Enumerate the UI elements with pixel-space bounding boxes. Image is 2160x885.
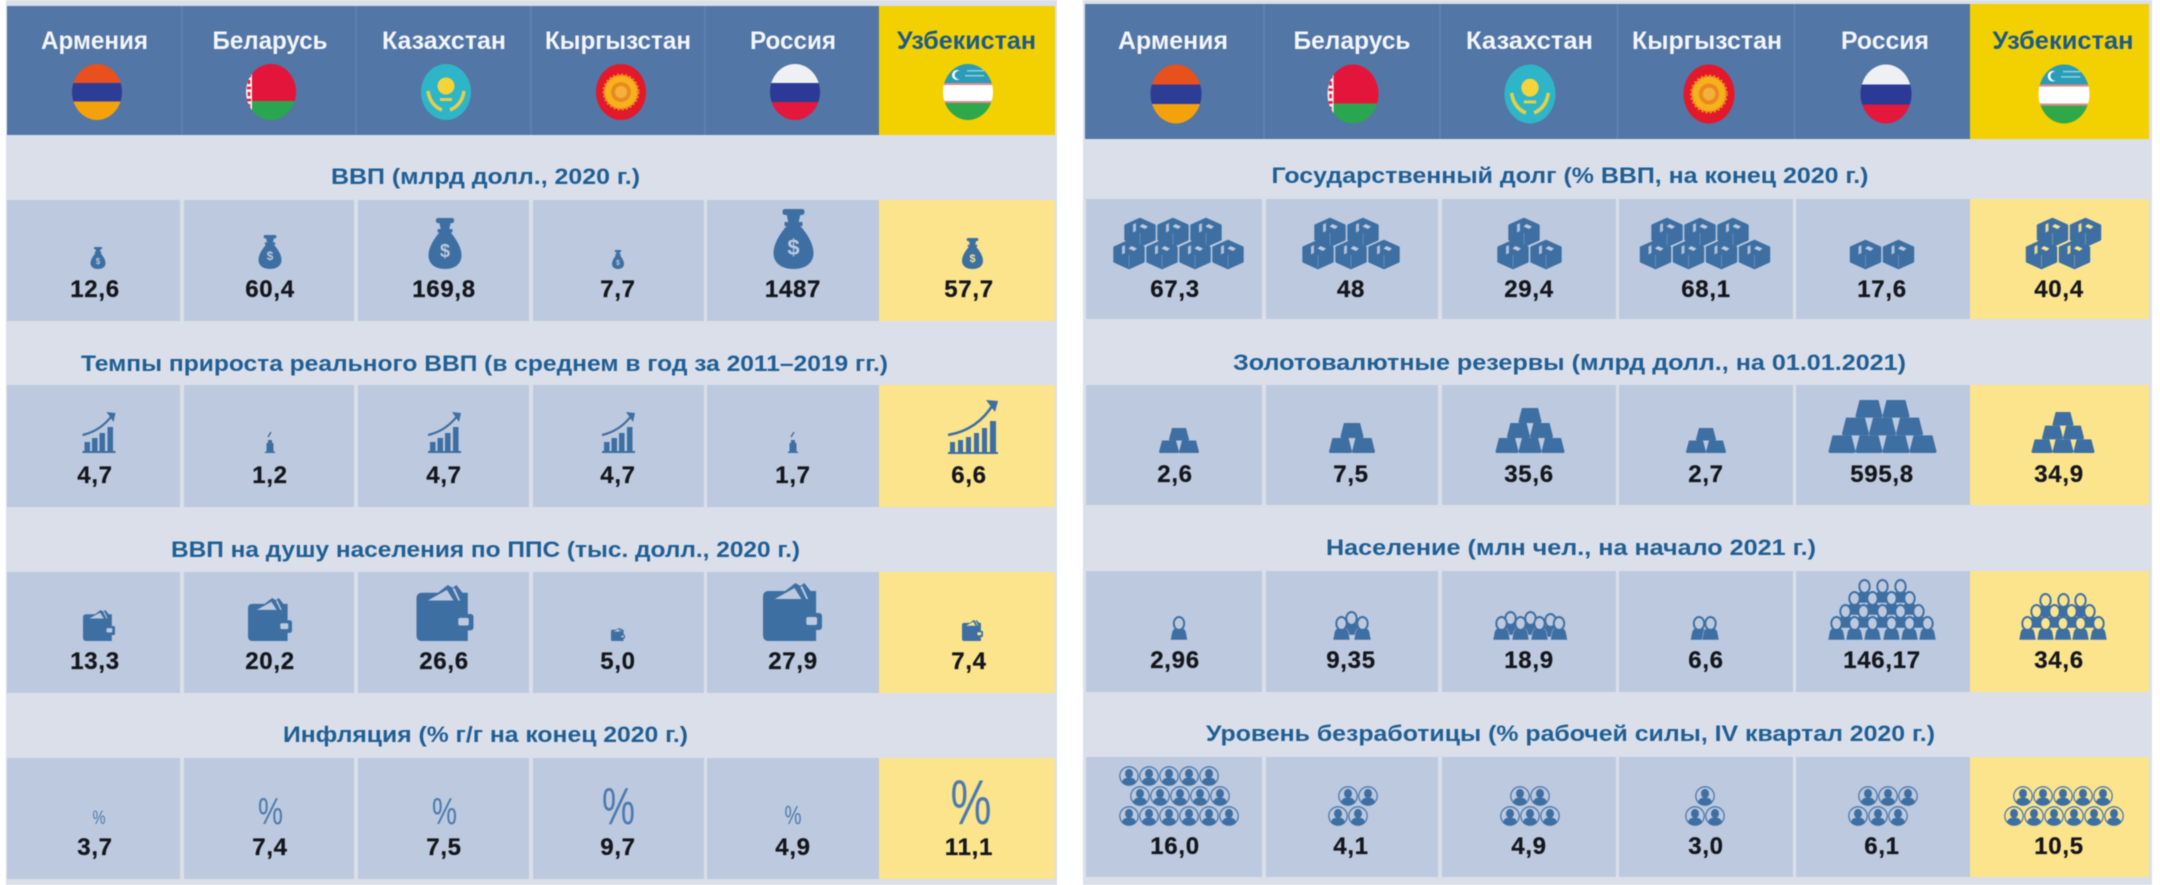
icon: money bag 12,6 xyxy=(90,247,106,269)
values: 146,17 xyxy=(1843,647,1921,674)
icon: people 18,9 xyxy=(1493,612,1568,640)
values: 60,4 xyxy=(245,276,295,303)
values xyxy=(70,276,994,303)
icon: unemployed 6,1 xyxy=(1849,787,1917,825)
country: Кыргызстан: Кыргызстан xyxy=(1632,27,1782,55)
icon: boxes 48 xyxy=(1304,219,1398,268)
values: 13,3 xyxy=(70,648,120,675)
icon: money bag 1487 xyxy=(774,209,814,269)
icon: people 146,17 xyxy=(1828,580,1936,640)
values xyxy=(1150,647,2084,674)
values xyxy=(1157,461,2084,488)
icon: percent 11,1: % xyxy=(950,768,992,838)
heading: Инфляция: Инфляция (% г/г на конец 2020 г.) xyxy=(283,722,688,747)
values: 169,8 xyxy=(412,276,476,303)
country: Беларусь xyxy=(212,27,328,120)
values: 6,6 xyxy=(951,462,987,489)
icon: percent 3,7: % xyxy=(92,808,106,829)
values: 4,9 xyxy=(1511,833,1547,860)
values: 4,1 xyxy=(1333,833,1369,860)
values: 7,4 xyxy=(252,834,288,861)
values xyxy=(77,834,993,861)
country: Казахстан xyxy=(1466,27,1593,124)
country: Казахстан xyxy=(382,27,506,120)
country: Беларусь: Беларусь xyxy=(212,27,328,55)
row: ВВП на душу values xyxy=(7,572,1055,693)
row: резервы values xyxy=(1086,385,2149,505)
values: 1,2 xyxy=(252,462,288,489)
values: 3,0 xyxy=(1688,833,1724,860)
panel: left table xyxy=(6,0,1057,885)
icon: unemployed 10,5 xyxy=(2005,787,2123,825)
values: 4,7 xyxy=(77,462,113,489)
icon: gold bars 34,9 xyxy=(2032,412,2094,453)
country: Армения: Армения xyxy=(1118,27,1228,55)
values: 57,7 xyxy=(944,276,994,303)
values: 11,1 xyxy=(945,834,993,861)
country: Узбекистан xyxy=(1992,27,2134,124)
values: 3,7 xyxy=(77,834,113,861)
icon: money bag 7,7: $ xyxy=(616,260,620,267)
country: Армения xyxy=(1118,27,1228,124)
icon: wallet 26,6 xyxy=(416,585,474,641)
header row: left countries xyxy=(7,6,1055,135)
values: 35,6 xyxy=(1504,461,1554,488)
values: 4,7 xyxy=(600,462,636,489)
values: 40,4 xyxy=(2034,276,2084,303)
row: безработица values xyxy=(1086,757,2149,877)
icon: gold bars 2,6 xyxy=(1159,428,1199,453)
values xyxy=(1150,833,2084,860)
icon: gold bars 2,7 xyxy=(1686,428,1726,453)
values: 48 xyxy=(1337,276,1365,303)
icon: boxes 40,4 xyxy=(2027,219,2100,268)
values: 20,2 xyxy=(245,648,295,675)
values: 26,6 xyxy=(419,648,469,675)
values: 6,1 xyxy=(1864,833,1900,860)
heading: Государственный долг: Государственный долг (% ВВП, на конец 2020 г.) xyxy=(1272,163,1868,188)
icon: wallet 5,0 xyxy=(611,628,625,641)
icon: growth chart 6,6 xyxy=(948,400,998,454)
icon: growth chart 4,7 xyxy=(602,412,635,453)
icon: boxes 29,4 xyxy=(1498,219,1560,268)
icon: boxes 67,3 xyxy=(1114,219,1242,268)
country: Кыргызстан: Кыргызстан xyxy=(545,27,691,55)
country: Россия: Россия xyxy=(1841,27,1929,55)
country: Кыргызстан xyxy=(1632,27,1782,124)
icon: unemployed 3,0 xyxy=(1686,787,1724,825)
values: 4,7 xyxy=(426,462,462,489)
icon: boxes 17,6 xyxy=(1851,241,1913,268)
icon: gold bars 35,6 xyxy=(1496,408,1564,453)
country: Казахстан: Казахстан xyxy=(1466,27,1593,55)
icon: growth chart 1,2 xyxy=(265,432,275,453)
icon: percent 7,5: % xyxy=(432,791,457,833)
values: 2,96 xyxy=(1150,647,1200,674)
icon: money bag 57,7 xyxy=(962,238,983,269)
heading: ВВП: ВВП (млрд долл., 2020 г.) xyxy=(331,164,640,189)
country: Узбекистан xyxy=(897,27,1036,120)
country: Беларусь xyxy=(1294,27,1410,124)
icon: gold bars 7,5 xyxy=(1329,423,1375,453)
values: 17,6 xyxy=(1857,276,1907,303)
country: Россия: Россия xyxy=(750,27,836,55)
icon: percent 7,4: % xyxy=(258,791,283,833)
values: 29,4 xyxy=(1504,276,1554,303)
values: 7,5 xyxy=(1333,461,1369,488)
country: Кыргызстан xyxy=(545,27,691,120)
values: 5,0 xyxy=(600,648,636,675)
values: 7,4 xyxy=(951,648,987,675)
values: 16,0 xyxy=(1150,833,1200,860)
icon: wallet 27,9 xyxy=(763,583,822,641)
panel: right table xyxy=(1083,0,2152,885)
row: население values xyxy=(1086,571,2149,692)
values: 595,8 xyxy=(1850,461,1914,488)
icon: growth chart 4,7 xyxy=(82,412,116,453)
values: 7,5 xyxy=(426,834,462,861)
icon: money bag 169,8: $ xyxy=(440,241,450,261)
values: 18,9 xyxy=(1504,647,1554,674)
values: 2,6 xyxy=(1157,461,1193,488)
country: Армения: Армения xyxy=(41,27,148,55)
values xyxy=(77,462,987,489)
values: 10,5 xyxy=(2034,833,2084,860)
values xyxy=(1150,276,2084,303)
icon: boxes 68,1 xyxy=(1641,219,1769,268)
icon: growth chart 1,7 xyxy=(788,432,798,453)
heading: Уровень безработицы: Уровень безработицы (% рабочей силы, IV квартал 2020 г.) xyxy=(1206,721,1935,746)
icon: unemployed 4,9 xyxy=(1501,787,1559,825)
icon: money bag 1487: $ xyxy=(787,235,800,260)
heading: Золотовалютные резервы: Золотовалютные резервы (млрд долл., на 01.01.2021) xyxy=(1233,350,1906,375)
values: 7,7 xyxy=(600,276,636,303)
icon: gold bars 595,8 xyxy=(1828,400,1936,453)
country: Россия xyxy=(750,27,836,120)
heading: Население: Население (млн чел., на начало 2021 г.) xyxy=(1326,535,1816,560)
values xyxy=(70,648,987,675)
values: 27,9 xyxy=(768,648,818,675)
icon: unemployed 16,0 xyxy=(1120,767,1238,825)
icon: wallet 20,2 xyxy=(248,598,292,641)
icon: percent 9,7: % xyxy=(602,778,635,836)
values: 9,35 xyxy=(1326,647,1376,674)
icon: people 9,35 xyxy=(1333,612,1371,640)
country: Узбекистан: Узбекистан xyxy=(897,27,1036,55)
values: 12,6 xyxy=(70,276,120,303)
heading: Темпы прироста: Темпы прироста реального ВВП (в среднем в год за 2011–2019 гг.) xyxy=(81,351,888,376)
icon: money bag 12,6: $ xyxy=(96,257,101,266)
icon: money bag 7,7 xyxy=(612,250,624,269)
icon: growth chart 4,7 xyxy=(428,412,461,453)
icon: people 6,6 xyxy=(1690,617,1719,640)
country: Россия xyxy=(1841,27,1929,124)
values: 2,7 xyxy=(1688,461,1724,488)
country: Беларусь: Беларусь xyxy=(1294,27,1410,55)
icon: wallet 13,3 xyxy=(83,610,115,641)
row: инфляция values xyxy=(7,758,1055,879)
values: 6,6 xyxy=(1688,647,1724,674)
values: 34,9 xyxy=(2034,461,2084,488)
values: 1487 xyxy=(765,276,821,303)
values: 67,3 xyxy=(1150,276,1200,303)
icon: money bag 57,7: $ xyxy=(969,253,976,265)
country: Узбекистан: Узбекистан xyxy=(1992,27,2134,55)
icon: people 2,96 xyxy=(1170,617,1188,640)
row: ВВП values xyxy=(7,200,1055,321)
icon: money bag 60,4: $ xyxy=(267,249,274,263)
row: госдолг values xyxy=(1086,199,2149,319)
values: 68,1 xyxy=(1681,276,1731,303)
icon: wallet 7,4 xyxy=(962,620,983,641)
country: Армения xyxy=(41,27,148,120)
icon: money bag 169,8 xyxy=(428,218,462,269)
heading: ВВП на душу: ВВП на душу населения по ППС (тыс. долл., 2020 г.) xyxy=(171,537,800,562)
header row: right countries xyxy=(1085,4,2149,139)
values: 9,7 xyxy=(600,834,636,861)
icon: unemployed 4,1 xyxy=(1329,787,1377,825)
values: 4,9 xyxy=(775,834,811,861)
icon: money bag 60,4 xyxy=(258,235,282,269)
icon: percent 4,9: % xyxy=(784,800,802,830)
country: Казахстан: Казахстан xyxy=(382,27,506,55)
icon: people 34,6 xyxy=(2019,594,2107,640)
values: 34,6 xyxy=(2034,647,2084,674)
row: темпы прироста values xyxy=(7,385,1055,507)
values: 1,7 xyxy=(775,462,811,489)
